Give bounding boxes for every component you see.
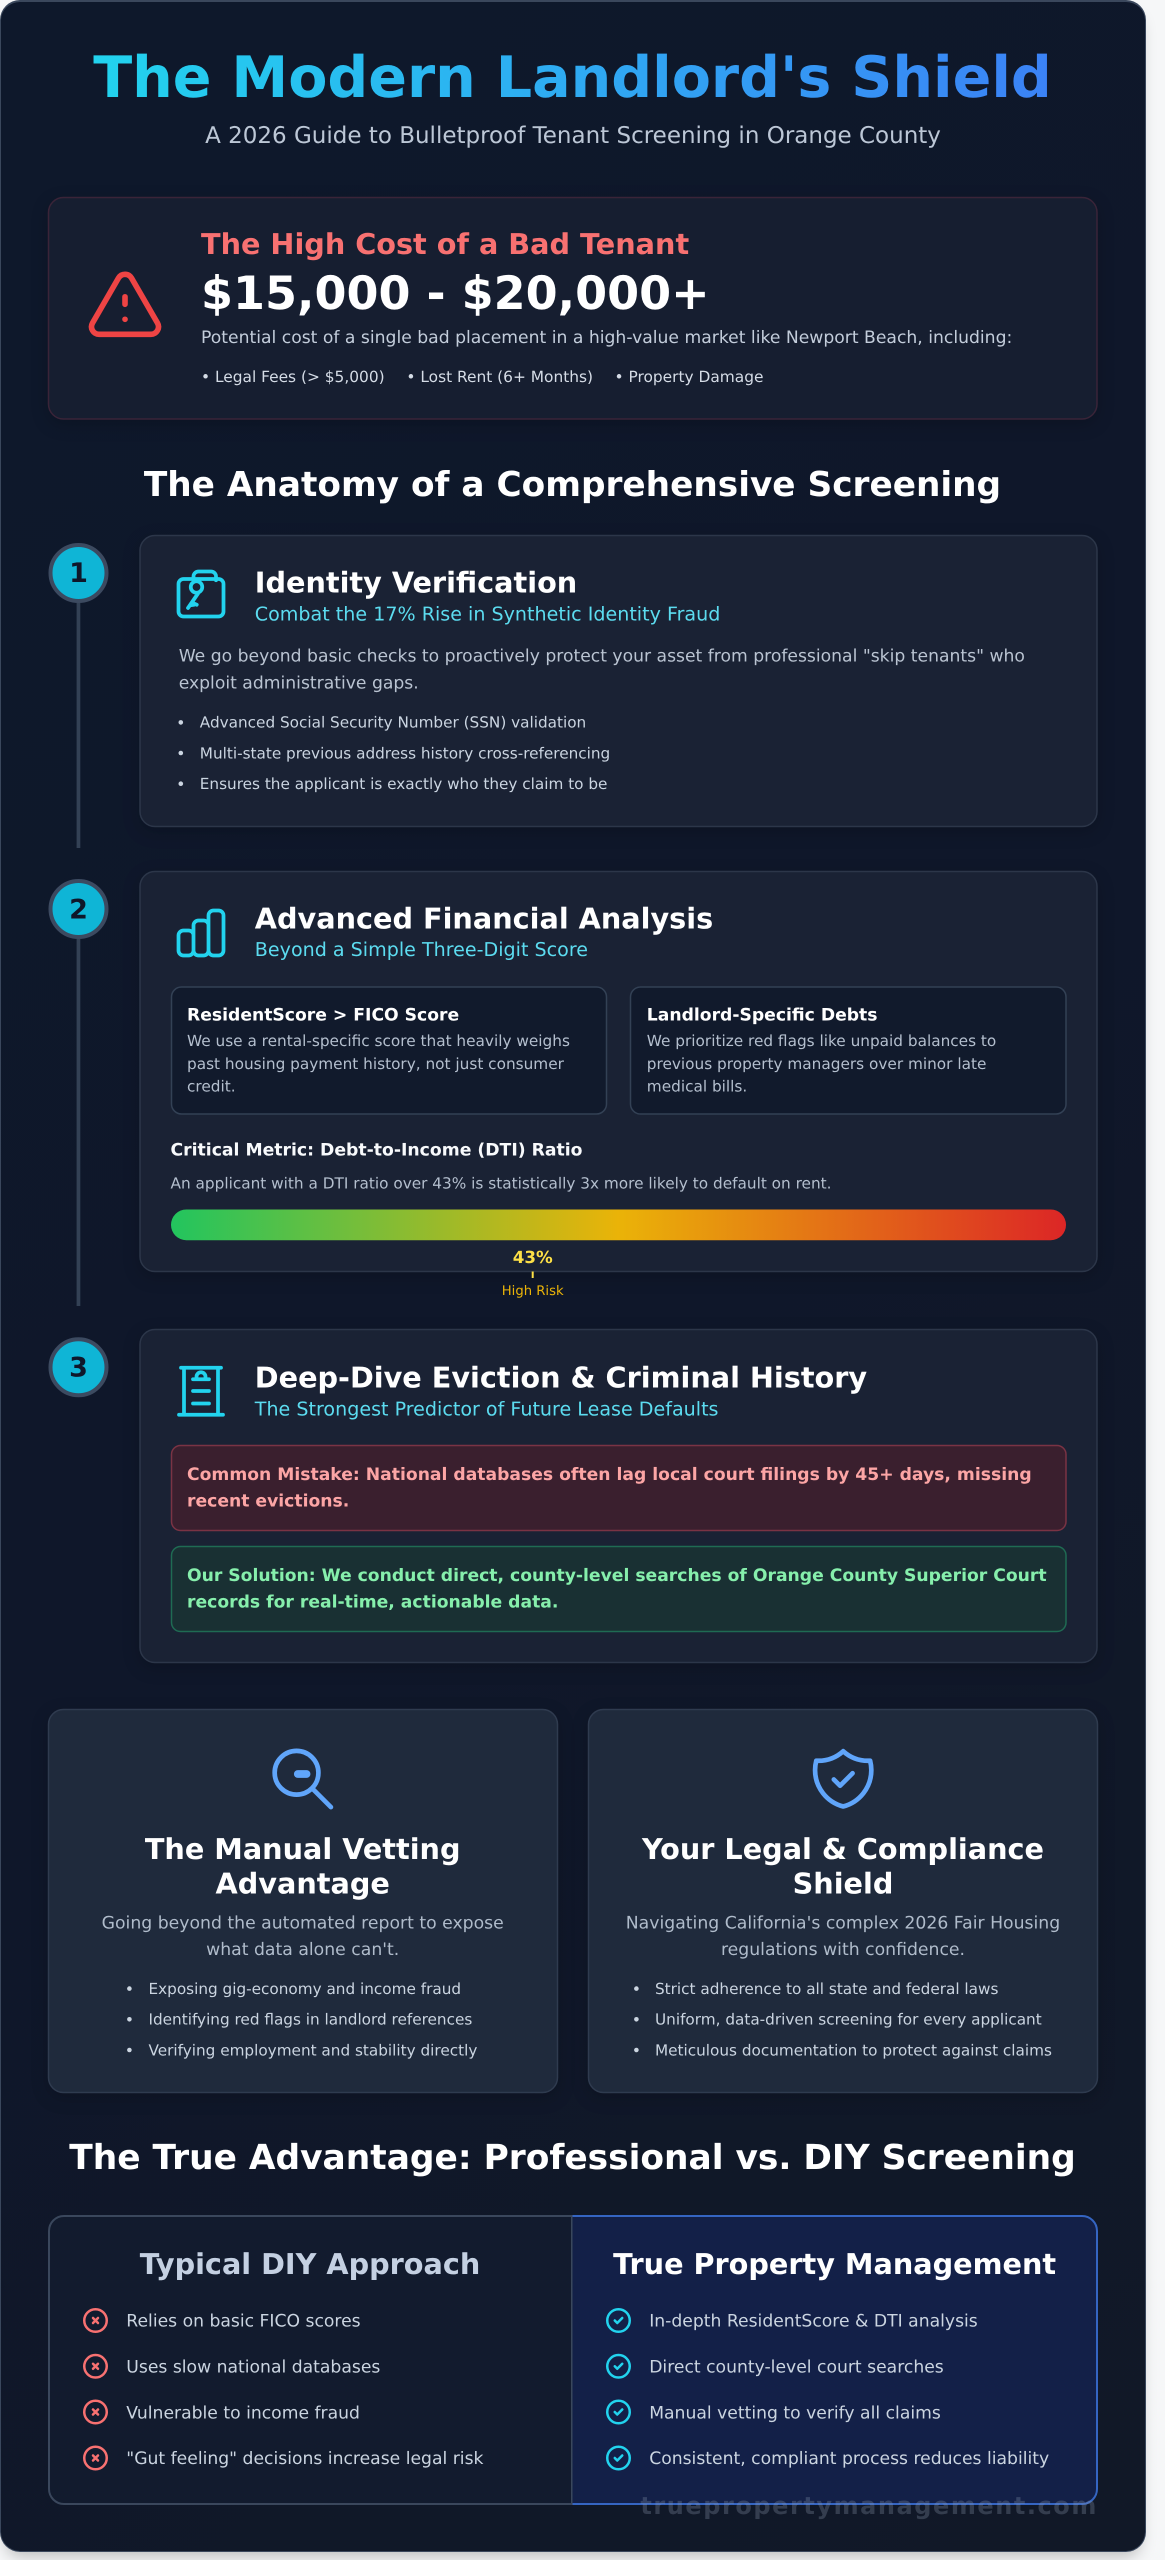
card: landlord-specific debts: Landlord-Specific Debts [647,1006,878,1026]
panel: legal and compliance shield [588,1710,1098,2092]
description [102,1913,504,1960]
section heading: anatomy: The Anatomy of a Comprehensive Screening [144,465,1001,505]
bullet list: Meticulous documentation to protect against claims [655,2041,1052,2059]
section heading: true advantage: The True Advantage: Professional vs. DIY Screening [69,2138,1076,2178]
icon: identity [178,572,224,616]
bullet list: Exposing gig-economy and income fraud [148,1980,461,1998]
body text: We go beyond basic checks to proactively protect your asset from professional "skip tenants" who [179,647,1025,667]
metric heading: Critical Metric: Debt-to-Income (DTI) Ratio [170,1141,583,1161]
heading [641,1832,1044,1900]
x icons and list items: Uses slow national databases [126,2358,380,2378]
description: what data alone can't. [206,1940,399,1960]
x icons and list items [84,2309,484,2469]
cost items [201,368,763,386]
step number 2 [50,881,106,937]
callout: common mistake: Common Mistake: National databases often lag local court filings by 45+ days, missing [187,1465,1032,1485]
metric description: An applicant with a DTI ratio over 43% is statistically 3x more likely to default on rent. [170,1174,832,1192]
callout: common mistake: recent evictions. [187,1492,349,1512]
panel: high cost of a bad tenant [48,198,1097,419]
subheading: The Strongest Predictor of Future Lease Defaults [254,1398,719,1420]
timeline connector 2 [77,938,80,1306]
watermark: truepropertymanagement.com [640,2492,1098,2520]
cost figure: $15,000 - $20,000+ [201,266,710,320]
card: landlord-specific debts: medical bills. [647,1078,747,1096]
body text: exploit administrative gaps. [179,674,419,694]
heading: Advantage [216,1866,390,1900]
bullet list: Verifying employment and stability directly [148,2041,477,2059]
title: The Modern Landlord's Shield [93,45,1052,111]
bullet list [634,1980,1052,2059]
bullet list: Uniform, data-driven screening for every applicant [655,2011,1042,2029]
bullet list: Advanced Social Security Number (SSN) validation [200,714,586,732]
DTI gradient bar [171,1210,1066,1240]
panel: step 1 identity verification [140,536,1097,826]
subheading: Beyond a Simple Three-Digit Score [255,938,588,961]
card: residentscore [172,987,606,1114]
description: Going beyond the automated report to expose [102,1913,504,1933]
check icons and list items [607,2309,1049,2469]
heading: True Property Management [613,2247,1056,2281]
panel: true property management [572,2216,1097,2504]
cost items: • Property Damage [614,368,763,386]
heading: Your Legal & Compliance [641,1832,1044,1866]
panel: manual vetting advantage [48,1710,558,2092]
subtitle: A 2026 Guide to Bulletproof Tenant Screening in Orange County [205,123,941,149]
bullet list: Multi-state previous address history cross-referencing [200,744,610,762]
check icons and list items: Manual vetting to verify all claims [649,2403,941,2423]
heading [145,1832,461,1900]
x icons and list items: Relies on basic FICO scores [126,2312,361,2332]
subheading: Combat the 17% Rise in Synthetic Identity Fraud [255,602,720,626]
heading: The High Cost of a Bad Tenant [201,227,689,261]
DTI marker: 43% [513,1247,553,1267]
bullet list: Identifying red flags in landlord references [148,2011,472,2029]
callout: our solution: Our Solution: We conduct direct, county-level searches of Orange County Superior Court [187,1566,1047,1586]
card: landlord-specific debts: We prioritize red flags like unpaid balances to [647,1032,996,1050]
heading: Typical DIY Approach [140,2247,480,2281]
card: landlord-specific debts: previous property managers over minor late [647,1055,986,1073]
step number 1: 1 [69,558,88,589]
icon: magnifier [275,1751,331,1807]
bullet list [178,714,610,793]
check icons and list items: Consistent, compliant process reduces liability [649,2449,1049,2469]
callout: common mistake [172,1446,1066,1530]
bullet list [127,1980,477,2059]
DTI marker: High Risk [502,1284,564,1299]
panel: step 3 eviction and criminal history [140,1330,1097,1662]
heading: The Manual Vetting [145,1832,461,1866]
heading: Shield [793,1866,893,1900]
callout: our solution: records for real-time, actionable data. [187,1593,558,1613]
check icons and list items: In-depth ResidentScore & DTI analysis [649,2312,978,2332]
card: residentscore: ResidentScore > FICO Score [187,1006,459,1026]
cost items: • Lost Rent (6+ Months) [406,368,593,386]
card: residentscore: past housing payment history, not just consumer [187,1055,565,1073]
description [626,1913,1060,1960]
icon: bar chart [178,910,224,956]
cost items: • Legal Fees (> $5,000) [201,368,385,386]
description: Navigating California's complex 2026 Fair Housing [626,1913,1060,1933]
icon: document [179,1368,223,1415]
card: residentscore: We use a rental-specific score that heavily weighs [187,1032,570,1050]
x icons and list items: Vulnerable to income fraud [126,2403,360,2423]
callout: our solution [172,1546,1066,1632]
card: residentscore: credit. [187,1078,236,1096]
heading: Advanced Financial Analysis [255,901,713,935]
DTI marker [502,1247,564,1299]
card: landlord-specific debts [630,987,1066,1114]
bullet list: Strict adherence to all state and federal laws [655,1980,998,1998]
icon: shield check [815,1751,871,1806]
check icons and list items: Direct county-level court searches [649,2358,944,2378]
timeline connector 1 [77,602,80,848]
description: Potential cost of a single bad placement in a high-value market like Newport Beach, including: [201,328,1012,348]
step number 3: 3 [69,1352,88,1383]
bullet list: Ensures the applicant is exactly who they claim to be [200,775,607,793]
step number 3 [50,1339,106,1395]
heading: Identity Verification [255,566,577,600]
heading: Deep-Dive Eviction & Criminal History [255,1360,867,1394]
panel: step 2 advanced financial analysis [140,872,1097,1299]
step number 2: 2 [69,894,88,925]
panel: typical DIY approach [49,2216,572,2504]
x icons and list items: "Gut feeling" decisions increase legal risk [126,2449,484,2469]
step number 1 [50,545,106,601]
icon: warning triangle [92,274,158,334]
description: regulations with confidence. [721,1940,965,1960]
body text [179,647,1025,694]
